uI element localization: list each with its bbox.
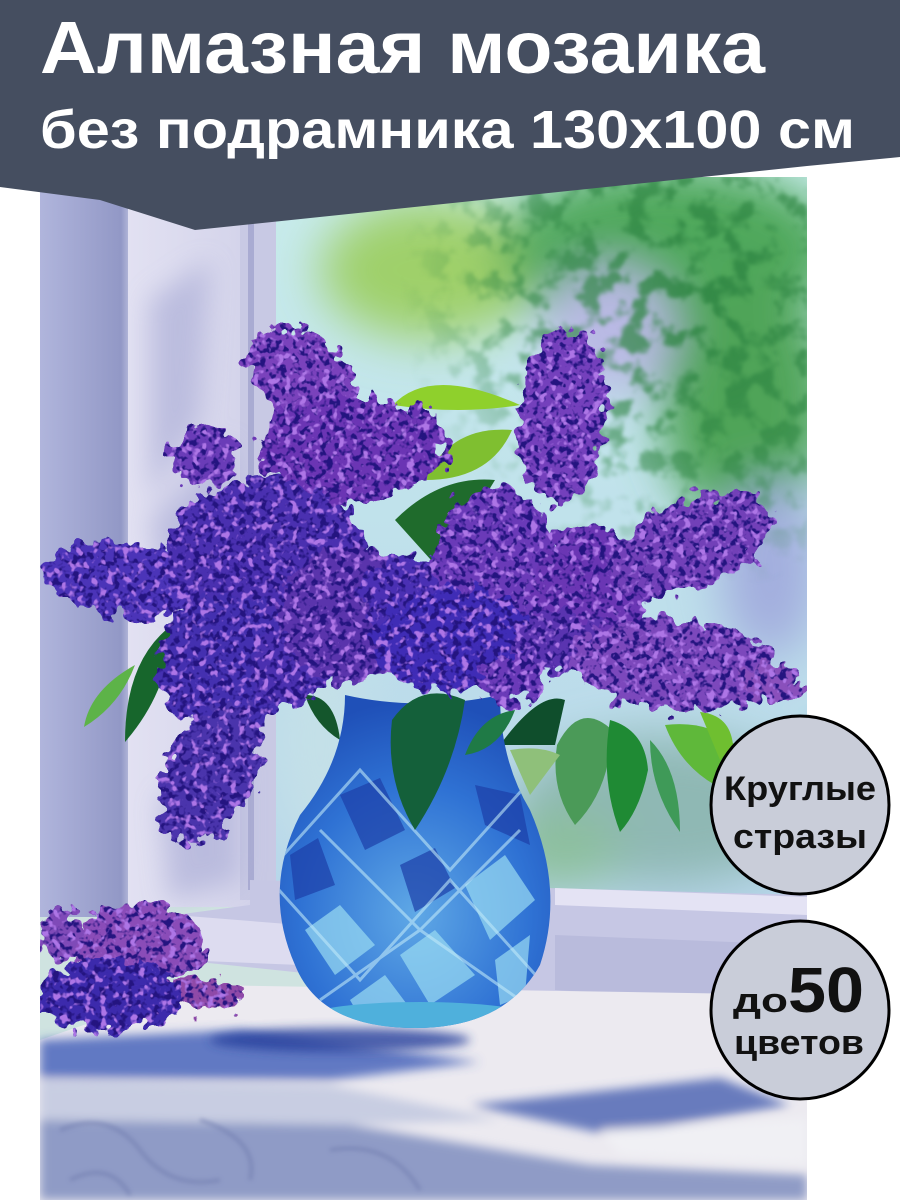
badge: up to 50 colours: [711, 921, 889, 1099]
leaves: [84, 385, 735, 832]
lilac flower clusters: [39, 306, 800, 862]
picture: lilac bouquet in blue vase: [38, 165, 840, 1200]
badge: up to 50 colours: до: [733, 982, 788, 1020]
badge: round rhinestones: стразы: [733, 818, 867, 856]
leaf in vase: [391, 693, 465, 830]
window view background: [40, 177, 807, 1040]
badge: round rhinestones: [711, 716, 889, 894]
glass vase: [280, 693, 550, 1028]
window sill: [183, 880, 807, 994]
badge: up to 50 colours: цветов: [734, 1024, 864, 1062]
badge: round rhinestones: Круглые: [724, 770, 876, 808]
window frame: [128, 177, 276, 907]
subtitle: без подрамника 130х100 см: [40, 100, 855, 160]
shaded wall: [40, 177, 130, 917]
badge: up to 50 colours: 50: [788, 954, 864, 1026]
title: Алмазная мозаика: [40, 6, 766, 89]
fallen lilac blossoms on sill: [38, 903, 243, 1031]
vase shadow: [210, 1028, 470, 1052]
table cloth: [40, 985, 807, 1200]
header banner: [0, 0, 900, 230]
mottled foliage: [416, 177, 807, 554]
